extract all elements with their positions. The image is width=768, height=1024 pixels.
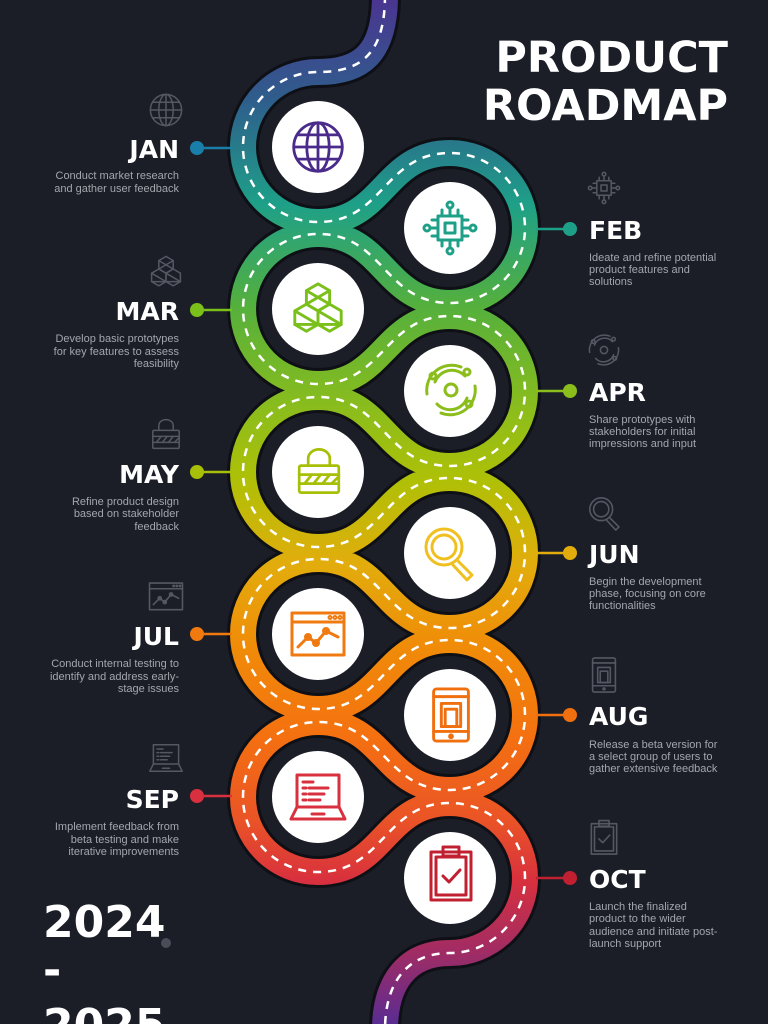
milestone: APR: stakeholders for initial: [589, 426, 695, 438]
year range: -: [43, 945, 61, 996]
milestone: OCT: [404, 821, 718, 950]
milestone: AUG: gather extensive feedback: [589, 763, 718, 775]
milestone: JUN: phase, focusing on core: [589, 588, 706, 600]
milestone: JUL: [50, 583, 364, 695]
milestone: MAY: MAY: [119, 460, 180, 489]
milestone: SEP: iterative improvements: [68, 846, 179, 858]
milestone: OCT: launch support: [589, 938, 661, 950]
milestone: JUN: [404, 498, 706, 612]
milestone: APR: impressions and input: [589, 438, 696, 450]
title: PRODUCT: [495, 33, 729, 83]
milestone: FEB: FEB: [589, 216, 642, 245]
milestone: SEP: SEP: [126, 785, 179, 814]
milestone: FEB: [404, 172, 716, 288]
milestone: SEP: beta testing and make: [71, 834, 179, 846]
milestone: MAR: [54, 256, 364, 370]
milestone: MAR: MAR: [116, 297, 179, 326]
milestone: FEB: Ideate and refine potential: [589, 252, 716, 264]
milestone: JUL: stage issues: [118, 683, 179, 695]
milestone: SEP: Implement feedback from: [55, 821, 179, 833]
milestone: JAN: Conduct market research: [56, 170, 179, 182]
milestone: APR: APR: [589, 378, 646, 407]
milestone: MAR: feasibility: [134, 358, 179, 370]
milestone: FEB: solutions: [589, 276, 633, 288]
milestone: MAY: based on stakeholder: [74, 508, 179, 520]
milestone: JAN: and gather user feedback: [54, 183, 179, 195]
milestone: JUN: Begin the development: [589, 576, 702, 588]
milestone: JUN: functionalities: [589, 600, 656, 612]
milestone: OCT: audience and initiate post-: [589, 926, 718, 938]
milestone: APR: [404, 335, 696, 450]
title: ROADMAP: [483, 81, 728, 131]
milestone: AUG: a select group of users to: [589, 751, 713, 763]
milestone: JUL: JUL: [131, 622, 179, 651]
milestone: JUL: Conduct internal testing to: [51, 658, 179, 670]
milestone: JUL: identify and address early-: [50, 671, 179, 683]
milestone: AUG: [404, 658, 718, 775]
milestone: OCT: OCT: [589, 865, 646, 894]
milestone: MAY: [72, 420, 364, 533]
milestone: SEP: [55, 745, 364, 858]
year range: 2024: [43, 897, 165, 948]
milestone: JUN: JUN: [587, 540, 640, 569]
milestone: MAR: Develop basic prototypes: [55, 333, 179, 345]
milestone: FEB: product features and: [589, 264, 690, 276]
milestone: MAR: for key features to assess: [54, 346, 179, 358]
milestone: JAN: JAN: [127, 135, 179, 164]
milestone: OCT: Launch the finalized: [589, 901, 687, 913]
milestone: APR: Share prototypes with: [589, 414, 695, 426]
milestone: AUG: AUG: [589, 702, 648, 731]
milestone: OCT: product to the wider: [589, 913, 686, 925]
year range: [43, 897, 171, 1024]
milestone: AUG: Release a beta version for: [589, 739, 718, 751]
milestone: MAY: Refine product design: [72, 496, 179, 508]
milestone: MAY: feedback: [134, 521, 179, 533]
title: [483, 33, 729, 131]
milestone: JAN: [54, 94, 364, 195]
road: [243, 0, 525, 1024]
